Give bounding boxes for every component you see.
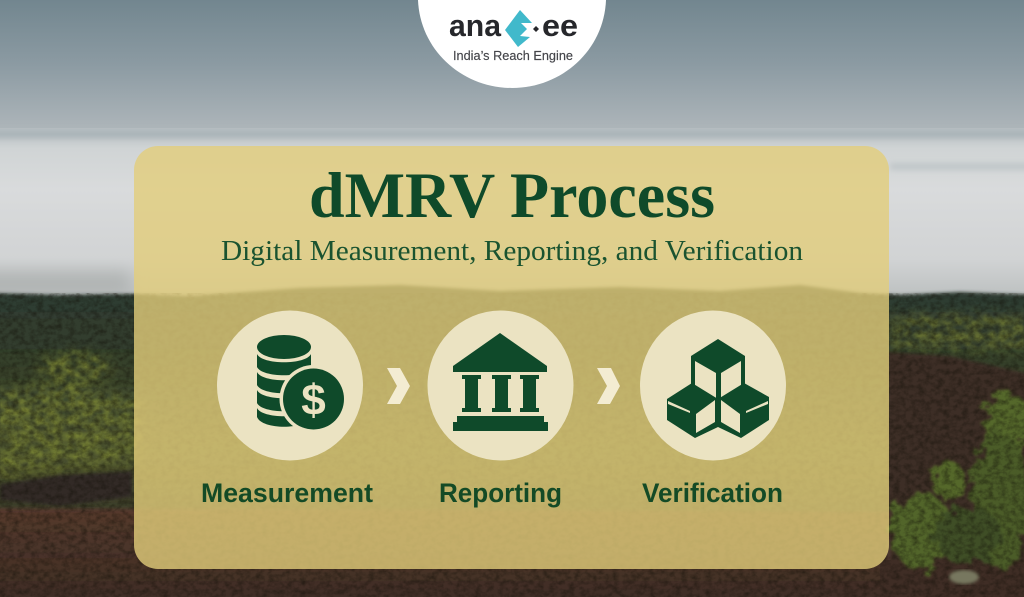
logo wordmark left: ana (449, 8, 502, 43)
step: reporting (428, 310, 574, 508)
arrow 1 (387, 368, 410, 404)
background: cloud layer (0, 128, 1024, 303)
background: dark lava field on the right (888, 352, 1024, 597)
icon: three cubes (667, 339, 769, 438)
panel: dMRV process (134, 146, 889, 569)
icon: classical building (453, 333, 548, 431)
logo mark (505, 10, 532, 47)
step: measurement (201, 310, 373, 508)
label: reporting: Reporting (439, 478, 562, 508)
background: rocky foreground (0, 508, 890, 597)
step: verification (640, 310, 786, 508)
logo tagline: India’s Reach Engine (453, 49, 573, 63)
logo dot (533, 26, 539, 32)
logo badge (418, 0, 606, 88)
icon circle: measurement (217, 310, 363, 460)
background: forested hillside (0, 285, 1024, 520)
icon circle: verification (640, 310, 786, 460)
label: measurement: Measurement (201, 478, 373, 508)
background: sky (0, 0, 1024, 140)
arrow 2 (597, 368, 620, 404)
label: verification: Verification (642, 478, 783, 508)
icon circle: reporting (428, 310, 574, 460)
subtitle: Digital Measurement, Reporting, and Verification (221, 235, 804, 267)
icon: coin stack with dollar (257, 335, 348, 433)
background: photographic texture (0, 293, 1024, 597)
title: dMRV Process (309, 160, 715, 232)
icon: coin stack with dollar: $ (301, 376, 326, 425)
background: pale shrub (949, 570, 979, 584)
logo wordmark right: ee (542, 8, 578, 43)
background: pine tree (890, 393, 1024, 570)
